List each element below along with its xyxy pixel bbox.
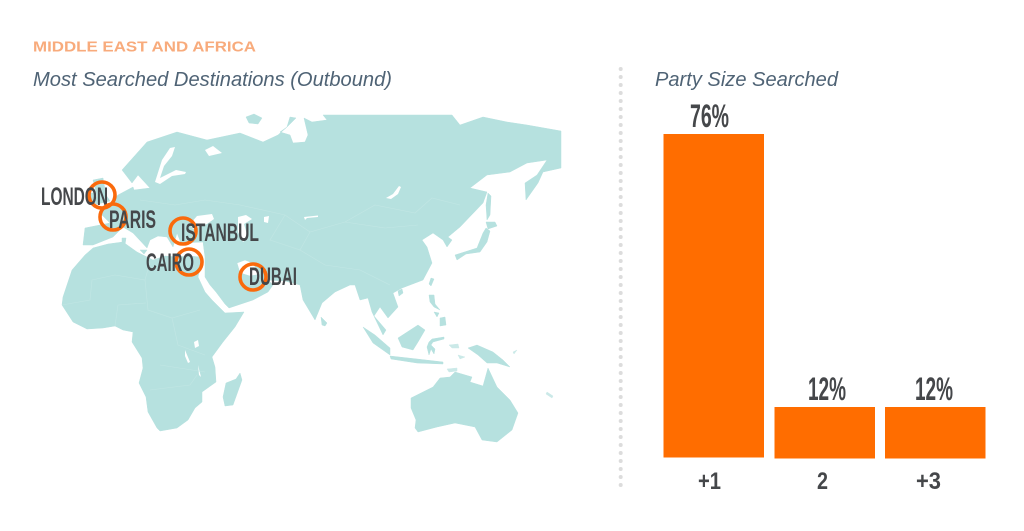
bar: +3, 12%: 12% (915, 371, 953, 407)
map: New Guinea (468, 345, 510, 367)
marker: Paris: PARIS (109, 206, 156, 234)
heading: most searched destinations: Most Searched Destinations (Outbound) (33, 69, 392, 91)
heading: party size searched: Party Size Searched (655, 69, 839, 91)
map: White Sea (205, 146, 222, 156)
map: small Pacific islands (447, 344, 553, 398)
map: Borneo (398, 325, 425, 350)
map: Lake Victoria (194, 340, 199, 348)
bar: 2, 12%: 12% (808, 371, 846, 407)
panel: bar chart of party size (664, 98, 986, 495)
bar: +1, 76%: +1 (698, 468, 721, 495)
map: Australia (411, 368, 518, 442)
map: Sumatra (363, 327, 390, 355)
map: Java (390, 356, 443, 364)
heading: region title: MIDDLE EAST AND AFRICA (33, 38, 256, 56)
map: faint country borders (62, 198, 460, 390)
map: Madagascar (223, 373, 242, 406)
marker: Istanbul: ISTANBUL (181, 219, 259, 247)
map: Africa (62, 242, 244, 431)
marker: London (41, 182, 115, 211)
map: Novaya Zemlya (246, 114, 262, 124)
marker: Istanbul (170, 218, 259, 247)
panel: world map with destinations (41, 114, 561, 442)
map: Aral Sea and Balkhash (264, 216, 318, 223)
map: Philippines (429, 295, 446, 326)
marker: Dubai (240, 263, 297, 291)
bar: 2, 12%: 2 (817, 468, 828, 495)
bar: +3, 12%: +3 (916, 468, 941, 495)
map: Japan (455, 222, 497, 260)
bar: +1, 76% (664, 98, 764, 495)
map: Eurasia (83, 115, 561, 335)
map: Sakhalin (486, 193, 491, 220)
bar: 2, 12% (774, 371, 875, 495)
map: Taiwan and Hainan (398, 278, 434, 296)
bar: +3, 12% (885, 371, 986, 495)
map: Great Britain (93, 178, 110, 205)
marker: Cairo: CAIRO (146, 249, 194, 277)
marker: Dubai: DUBAI (249, 263, 297, 291)
marker: Paris (100, 204, 156, 234)
map: Ireland (87, 193, 95, 202)
map: Sicily and Sardinia (122, 238, 147, 254)
map: Caspian Sea (238, 215, 252, 242)
marker: Cairo (146, 249, 202, 277)
bar: +1, 76%: 76% (690, 98, 729, 134)
map: Sulawesi (427, 337, 444, 355)
map: Baltic Sea (155, 147, 186, 184)
map: landmasses (62, 114, 561, 442)
map: inland seas and lakes (155, 146, 401, 377)
map: Sri Lanka (321, 317, 327, 326)
marker: London: LONDON (41, 183, 108, 211)
map: Black Sea (190, 214, 214, 229)
map: African rift lakes (185, 350, 201, 377)
map: Lake Baikal (386, 186, 401, 199)
